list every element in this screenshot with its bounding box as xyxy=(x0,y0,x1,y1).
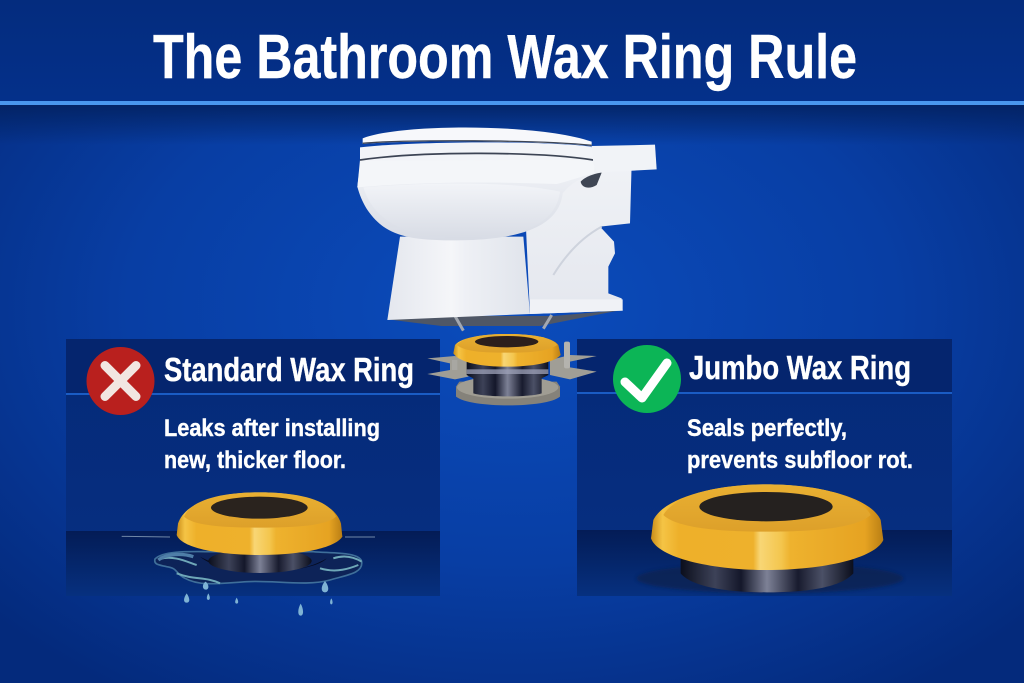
tank stub xyxy=(592,145,657,173)
text: standard description xyxy=(164,415,380,474)
lid xyxy=(363,127,592,146)
bowl rim xyxy=(357,160,595,187)
metal side brackets xyxy=(427,342,597,379)
toilet xyxy=(357,127,657,331)
rear trapway xyxy=(523,163,632,314)
debris shadow xyxy=(637,563,903,593)
ring flange xyxy=(208,549,312,573)
small wax ring xyxy=(453,334,561,367)
illustration: jumbo ring xyxy=(637,484,903,593)
panel: standard wax ring xyxy=(66,339,440,616)
icon: green check xyxy=(613,345,681,413)
base pedestal xyxy=(387,237,530,320)
text: jumbo description: Seals perfectly, xyxy=(687,415,847,442)
text: jumbo description xyxy=(687,415,913,474)
seat xyxy=(360,142,595,161)
illustration: leaking standard ring xyxy=(122,492,375,616)
underside and bolts xyxy=(388,310,622,331)
text: standard description: new, thicker floor. xyxy=(164,447,346,474)
flange pipe xyxy=(467,360,548,396)
text: jumbo description: prevents subfloor rot. xyxy=(687,447,913,474)
wax ring xyxy=(177,492,342,555)
rear bolt cap xyxy=(581,173,602,188)
wax ring xyxy=(651,484,883,570)
heading: jumbo wax ring: Jumbo Wax Ring xyxy=(689,349,911,386)
title banner xyxy=(0,0,1024,145)
center flange with wax ring xyxy=(427,334,597,405)
icon: red x xyxy=(86,347,154,415)
heading: standard wax ring: Standard Wax Ring xyxy=(164,351,414,388)
panel: jumbo wax ring xyxy=(577,339,952,596)
title: The Bathroom Wax Ring Rule xyxy=(153,23,857,92)
text: standard description: Leaks after installing xyxy=(164,415,380,442)
ring flange xyxy=(681,558,853,592)
floor plate xyxy=(456,376,560,405)
water puddle xyxy=(122,536,375,616)
bowl xyxy=(357,160,595,240)
